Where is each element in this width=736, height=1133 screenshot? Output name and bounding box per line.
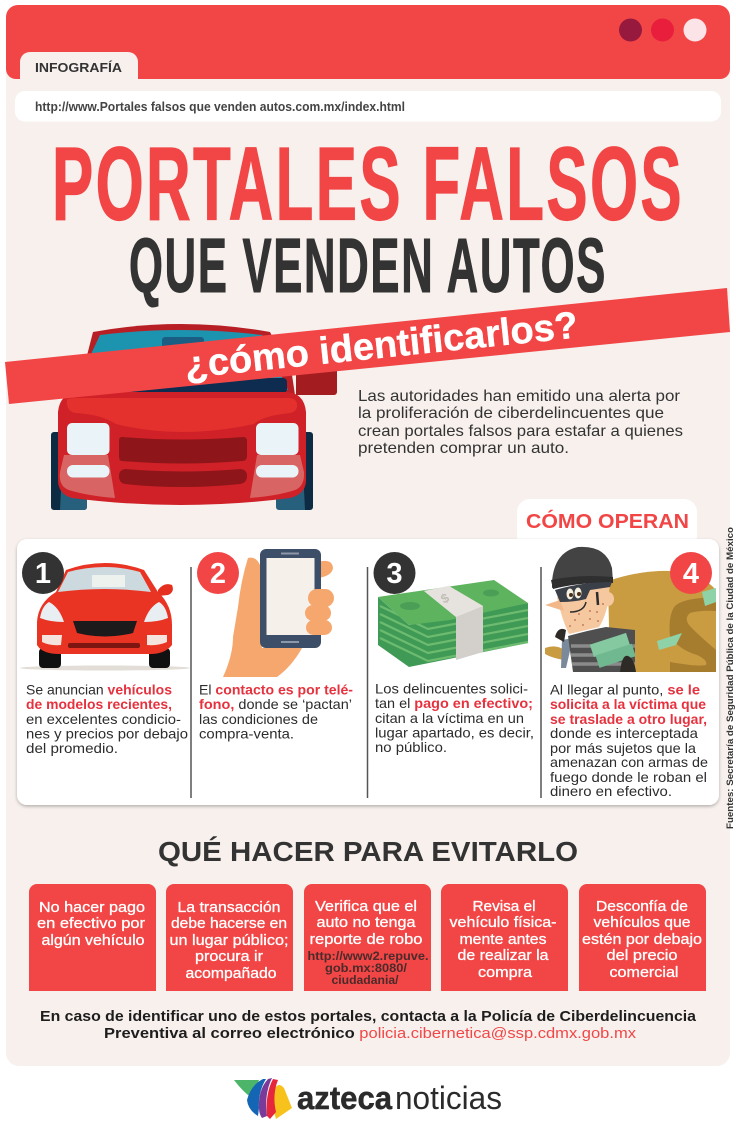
intro paragraph: pretenden comprar un auto.: [358, 440, 569, 457]
heading: qué hacer para evitarlo: QUÉ HACER PARA EVITARLO: [158, 836, 578, 867]
tip 1: algún vehículo: [42, 933, 144, 949]
step 3 text: citan a la víctima en un: [375, 710, 524, 726]
step 3 money stack illustration: $: [438, 590, 452, 607]
logo: azteca noticias: [234, 1078, 502, 1119]
intro paragraph: la proliferación de ciberdelincuentes que: [358, 405, 664, 422]
step 2 hand and phone illustration: [223, 549, 334, 677]
tab: cómo operan: [517, 499, 697, 549]
step 1 text: [26, 682, 188, 756]
step 1 car illustration: [20, 563, 190, 670]
step 4 badge: 4: [683, 558, 699, 590]
step 3 money stack illustration: [378, 580, 528, 667]
step 3 badge: [374, 552, 416, 594]
intro paragraph: crean portales falsos para estafar a quienes: [358, 423, 683, 440]
step 1 badge: [22, 552, 64, 594]
logo: azteca noticias: noticias: [395, 1080, 502, 1116]
money bag: [608, 571, 716, 672]
step 2 text: fono, donde se ‘pactan’: [199, 696, 352, 712]
tip 5: estén por debajo: [582, 932, 702, 948]
step 3 text: Los delincuentes solici-: [375, 680, 528, 696]
step 1 text: de modelos recientes,: [26, 696, 172, 712]
step 3 text: lugar apartado, es decir,: [375, 724, 534, 740]
tip 2: acompañado: [186, 966, 276, 982]
step 4 text: dinero en efectivo.: [550, 783, 672, 799]
tip 4: [441, 884, 568, 991]
step 4 text: Al llegar al punto, se le: [550, 682, 700, 698]
tip 2: procura ir: [195, 949, 263, 965]
address bar: [15, 91, 721, 122]
tip 3: Verifica que el: [315, 899, 417, 915]
contact note: [40, 1008, 697, 1042]
step 4 text: por más sujetos que la: [550, 740, 696, 756]
step 1 text: Se anuncian vehículos: [26, 682, 172, 698]
step 2 text: las condiciones de: [199, 711, 318, 727]
window dots: [619, 18, 706, 42]
intro paragraph: Las autoridades han emitido una alerta por: [358, 388, 681, 405]
sources vertical note: Fuentes: Secretaría de Seguridad Pública de la Ciudad de México: [725, 527, 736, 829]
tip 2: un lugar público;: [170, 933, 288, 949]
tip 2: [166, 884, 293, 991]
tip 3: auto no tenga: [316, 915, 417, 931]
step 3 text: [375, 680, 534, 755]
logo: azteca noticias: azteca: [297, 1080, 392, 1116]
tip 5: Desconfía de: [596, 899, 688, 915]
step 3 text: tan el pago en efectivo;: [375, 695, 533, 711]
step 4 badge: [670, 552, 712, 594]
tip 3: reporte de robo: [310, 932, 422, 948]
step 4 text: donde es interceptada: [550, 725, 698, 741]
step 4 text: amenazan con armas de: [550, 754, 708, 770]
step 4 text: fuego donde le roban el: [550, 769, 707, 785]
tab: infografía: [20, 52, 138, 79]
step 2 badge: 2: [210, 558, 226, 590]
tab: cómo operan: CÓMO OPERAN: [526, 509, 689, 533]
step 4 text: [550, 682, 708, 799]
step 2 badge: [197, 552, 239, 594]
tip 3: ciudadania/: [332, 975, 399, 987]
tip cards: [29, 884, 706, 991]
step 4 thief illustration: [545, 547, 716, 672]
step 4 text: solicita a la víctima que: [550, 696, 706, 712]
step 2 text: El contacto es por telé-: [199, 682, 353, 698]
illustration: large red car: [51, 324, 337, 510]
tip 1: No hacer pago: [39, 900, 145, 916]
tip 4: compra: [478, 965, 533, 981]
thief body: [568, 627, 635, 672]
thief hat and mask: [552, 547, 613, 588]
tip 2: La transacción: [178, 900, 280, 916]
intro paragraph: [358, 388, 683, 457]
address bar: http://www.Portales falsos que venden autos.com.mx/index.html: [35, 100, 405, 114]
panel: steps card: [17, 539, 719, 805]
tip 2: debe hacerse en: [171, 916, 287, 932]
contact note: Preventiva al correo electrónico policia.cibernetica@ssp.cdmx.gob.mx: [104, 1025, 637, 1042]
banner: ¿cómo identificarlos?: ¿cómo identificarlos?: [183, 305, 580, 387]
tip 5: vehículos que: [594, 915, 690, 931]
logo mark: [234, 1078, 292, 1119]
tip 3: http://www2.repuve.: [308, 951, 428, 963]
tip 5: [579, 884, 706, 991]
step 2 text: compra-venta.: [199, 726, 294, 742]
tab: infografía: INFOGRAFÍA: [35, 60, 123, 75]
tip 4: de realizar la: [458, 948, 550, 964]
step 1 badge: 1: [35, 558, 51, 590]
banknotes in arms: [590, 632, 636, 668]
banner: ¿cómo identificarlos?: [5, 288, 730, 404]
tip 3: gob.mx:8080/: [325, 963, 408, 975]
tip 5: comercial: [610, 965, 678, 981]
tip 1: en efectivo por: [37, 916, 145, 932]
step 3 text: no público.: [375, 739, 447, 755]
step 3 badge: 3: [386, 558, 403, 590]
step 1 text: en excelentes condicio-: [26, 711, 181, 727]
step 2 text: [199, 682, 353, 742]
tip 1: [29, 884, 156, 991]
tip 5: del precio: [606, 948, 678, 964]
contact note: En caso de identificar uno de estos portales, contacta a la Policía de Ciberdelincuencia: [40, 1008, 697, 1025]
step 1 text: nes y precios por debajo: [26, 726, 188, 742]
tip 4: Revisa el: [472, 899, 536, 915]
thief face: [557, 583, 610, 634]
tip 4: mente antes: [460, 932, 546, 948]
tip 4: vehículo física-: [450, 915, 557, 931]
step 1 text: del promedio.: [26, 740, 118, 756]
header bar: [6, 5, 730, 79]
step 4 text: se traslade a otro lugar,: [550, 711, 707, 727]
tip 3: [304, 884, 431, 991]
